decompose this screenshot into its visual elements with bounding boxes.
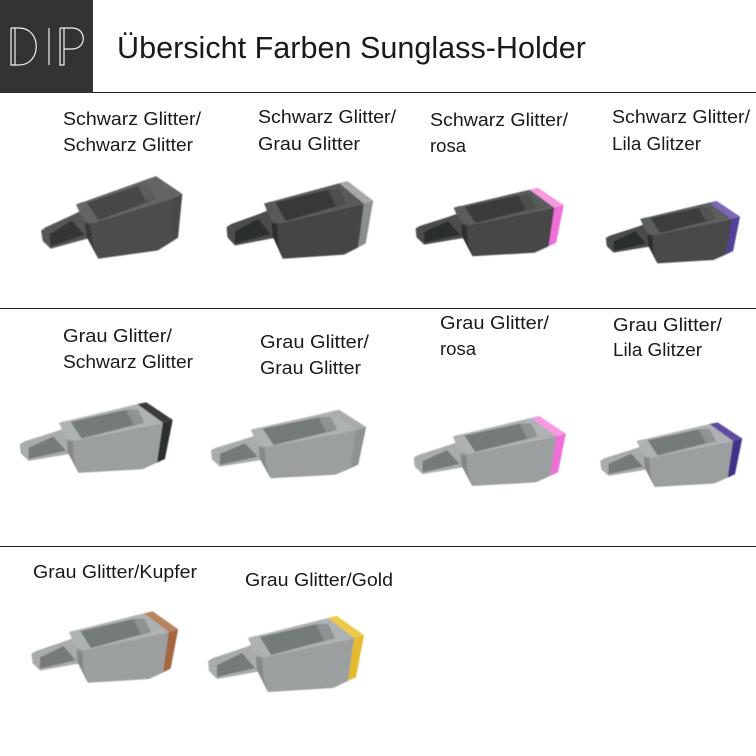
label: Schwarz Glitter / Schwarz Glitter: Schwarz Glitter bbox=[63, 135, 193, 155]
label: Grau Glitter / Grau Glitter bbox=[260, 332, 369, 378]
label: Grau Glitter / Lila Glitzer bbox=[613, 315, 722, 360]
holder: grey / black bbox=[20, 402, 173, 473]
holder: grey / purple bbox=[600, 422, 742, 487]
label: Schwarz Glitter / Schwarz Glitter: Schwarz Glitter/ bbox=[63, 109, 201, 129]
label: Grau Glitter / rosa: Grau Glitter/ bbox=[440, 313, 549, 333]
holder: grey / pink bbox=[414, 416, 566, 486]
label: Schwarz Glitter / rosa: Schwarz Glitter/ bbox=[430, 110, 568, 130]
label: Grau Glitter / Schwarz Glitter: Grau Glitter/ bbox=[63, 326, 172, 346]
holder: black / pink bbox=[416, 188, 564, 256]
holder: black / grey bbox=[227, 181, 373, 259]
label: Grau Glitter / Grau Glitter: Grau Glitter/ bbox=[260, 332, 369, 352]
title: Übersicht Farben Sunglass-Holder bbox=[117, 30, 586, 65]
label: Grau Glitter / Gold: Grau Glitter/Gold bbox=[245, 570, 393, 590]
label: Schwarz Glitter / rosa: rosa bbox=[430, 136, 467, 156]
label: Grau Glitter / Schwarz Glitter bbox=[63, 326, 193, 372]
label: Schwarz Glitter / Grau Glitter: Schwarz Glitter/ bbox=[258, 107, 396, 127]
logo: DIP bbox=[0, 0, 93, 93]
label: Schwarz Glitter / Grau Glitter bbox=[258, 107, 396, 154]
holder: grey / gold bbox=[208, 616, 364, 692]
label: Grau Glitter / Grau Glitter: Grau Glitter bbox=[260, 358, 361, 378]
holder: black / black bbox=[38, 174, 186, 263]
holder: grey / copper bbox=[32, 611, 178, 683]
label: Schwarz Glitter / Schwarz Glitter bbox=[63, 109, 201, 155]
label: Schwarz Glitter / Lila Glitzer: Schwarz Glitter/ bbox=[612, 107, 750, 127]
label: Grau Glitter / rosa bbox=[440, 313, 549, 359]
label: Grau Glitter / Kupfer: Grau Glitter/Kupfer bbox=[33, 562, 197, 582]
label: Schwarz Glitter / Lila Glitzer: Lila Glitzer bbox=[612, 134, 701, 154]
label: Grau Glitter / Lila Glitzer: Grau Glitter/ bbox=[613, 315, 722, 335]
label: Grau Glitter / Lila Glitzer: Lila Glitzer bbox=[613, 340, 702, 360]
label: Schwarz Glitter / Lila Glitzer bbox=[612, 107, 750, 154]
label: Grau Glitter / rosa: rosa bbox=[440, 339, 477, 359]
label: Schwarz Glitter / Grau Glitter: Grau Glitter bbox=[258, 134, 360, 154]
label: Schwarz Glitter / rosa bbox=[430, 110, 568, 156]
holder: black / purple bbox=[606, 201, 740, 263]
holder: grey / grey bbox=[211, 410, 366, 478]
label: Grau Glitter / Schwarz Glitter: Schwarz Glitter bbox=[63, 352, 193, 372]
